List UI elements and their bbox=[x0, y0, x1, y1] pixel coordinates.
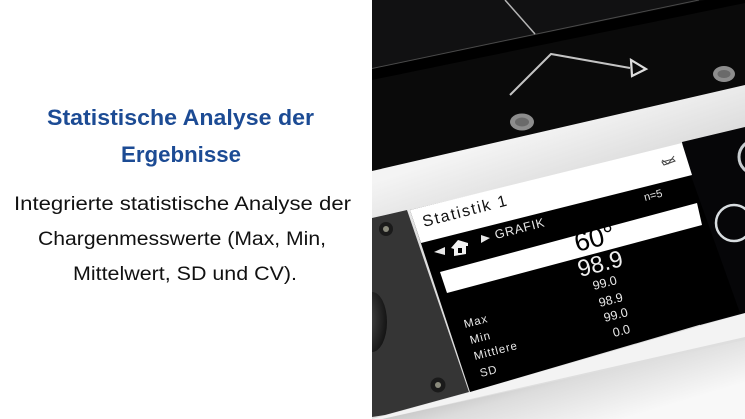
statistic labels: Min bbox=[469, 330, 492, 347]
mail icon bbox=[662, 156, 675, 165]
statistic labels: SD bbox=[479, 364, 499, 380]
screw left bbox=[510, 114, 534, 130]
description text: Chargenmesswerte (Max, Min, bbox=[38, 229, 326, 250]
device dark top surface bbox=[372, 0, 745, 175]
heading: Statistische Analyse der bbox=[47, 105, 314, 130]
display title: Statistik 1 bbox=[421, 192, 510, 231]
statistic labels bbox=[464, 316, 517, 376]
display selected row bbox=[440, 203, 702, 293]
nav left triangle bbox=[434, 247, 445, 255]
angle value: 60° bbox=[571, 219, 618, 258]
display header bar bbox=[410, 143, 692, 243]
table background bbox=[372, 337, 745, 419]
display screen bbox=[410, 176, 700, 392]
panel screw top bbox=[379, 222, 393, 236]
touch circle partial bbox=[739, 140, 745, 174]
statistic values bbox=[593, 276, 630, 336]
mean value: 98.9 bbox=[575, 245, 626, 282]
statistic values: 98.9 bbox=[597, 290, 624, 310]
touch circle bbox=[716, 205, 745, 241]
front strip bbox=[372, 313, 745, 419]
white device frame bbox=[372, 85, 745, 419]
statistic values: 99.0 bbox=[602, 305, 629, 325]
heading: Ergebnisse bbox=[121, 142, 241, 167]
description text: Integrierte statistische Analyse der bbox=[14, 194, 352, 215]
grey side panel bbox=[372, 210, 469, 417]
panel screw bottom bbox=[430, 378, 446, 392]
statistic labels: Max bbox=[463, 313, 489, 331]
black control area bbox=[682, 127, 745, 325]
device photo panel bbox=[357, 0, 745, 419]
statistic values: 99.0 bbox=[591, 273, 618, 293]
sample count: n=5 bbox=[643, 188, 664, 204]
engraved arrow bbox=[510, 54, 646, 95]
description text: Mittelwert, SD und CV). bbox=[73, 264, 297, 285]
left text panel bbox=[0, 0, 372, 419]
nav right triangle bbox=[481, 235, 490, 243]
screw right bbox=[713, 66, 735, 82]
statistic labels: Mittlere bbox=[473, 340, 519, 363]
statistic values: 0.0 bbox=[611, 322, 632, 340]
description text bbox=[14, 194, 352, 285]
heading bbox=[47, 105, 314, 167]
home icon bbox=[451, 240, 468, 256]
joystick knob bbox=[372, 292, 387, 352]
engraved top line bbox=[505, 0, 535, 34]
nav label: GRAFIK bbox=[493, 215, 546, 242]
